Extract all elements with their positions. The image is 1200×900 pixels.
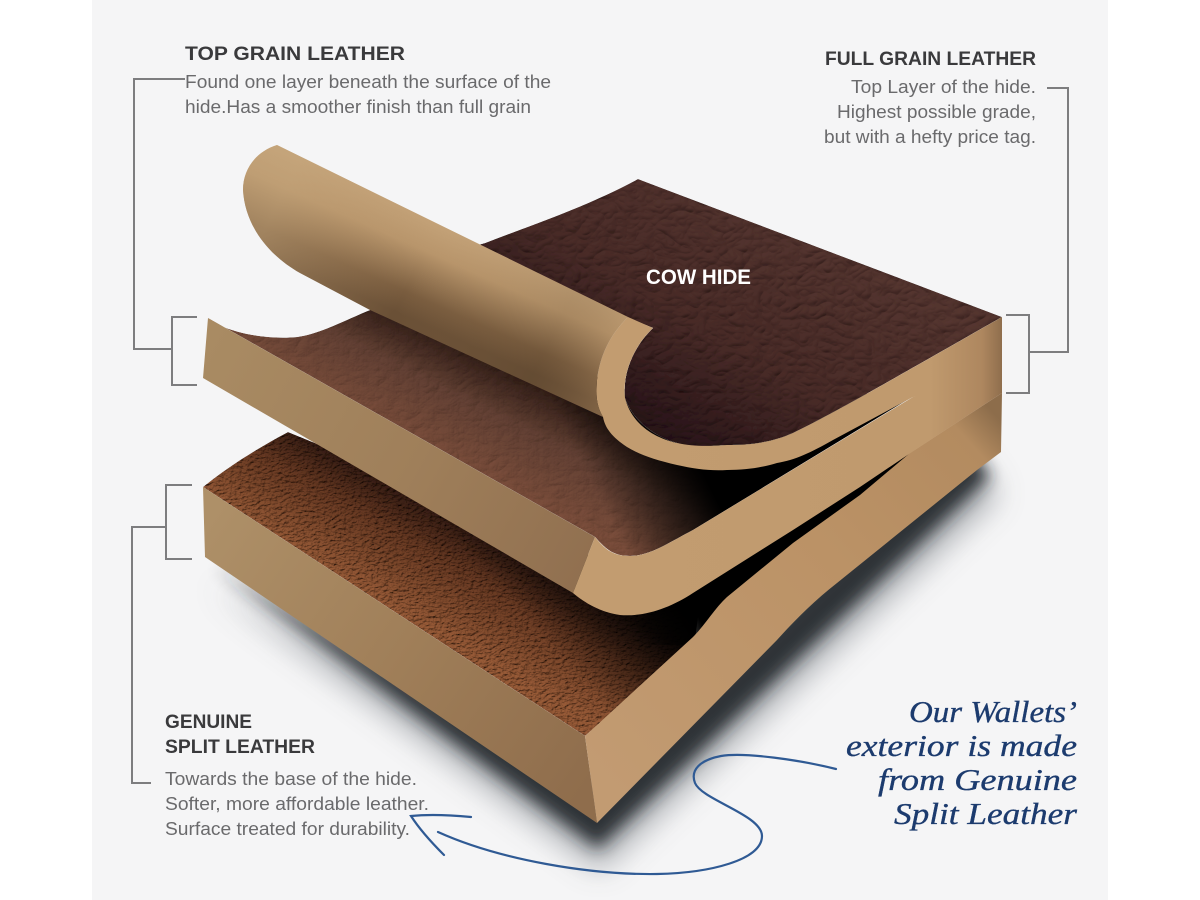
label: top grain leather: Found one layer beneath the surface of the (185, 72, 551, 92)
handwritten callout: Our Wallets’ (909, 694, 1077, 729)
rolled back leather flap (243, 145, 628, 417)
label: full grain leather: Highest possible grade, (837, 102, 1036, 122)
bracket: top grain leather (134, 79, 197, 385)
top grain left cut face (203, 318, 595, 593)
label: genuine split leather: SPLIT LEATHER (165, 737, 315, 758)
bracket: genuine split leather (132, 485, 192, 783)
genuine right cut face (585, 393, 1002, 823)
genuine left cut face (203, 487, 597, 823)
handwritten callout: from Genuine (878, 762, 1077, 797)
label: full grain leather: Top Layer of the hide. (851, 77, 1036, 97)
bracket: full grain leather (1006, 88, 1068, 393)
gap shadow lower (630, 450, 915, 645)
label: top grain leather: hide.Has a smoother finish than full grain (185, 97, 531, 117)
layer: full grain leather (243, 145, 1002, 470)
handwritten callout: Split Leather (894, 796, 1078, 831)
layer: top grain leather (203, 290, 1002, 615)
top grain right cut face (573, 380, 1002, 615)
label: genuine split leather: Softer, more affordable leather. (165, 794, 429, 814)
arrow: callout to genuine leather (411, 755, 836, 874)
layer: genuine split leather (203, 393, 1002, 823)
label: full grain leather: but with a hefty price tag. (824, 127, 1036, 147)
genuine leather surface (203, 432, 700, 736)
label: cow hide: COW HIDE (646, 266, 751, 289)
label: full grain leather: FULL GRAIN LEATHER (825, 49, 1036, 70)
label: top grain leather: TOP GRAIN LEATHER (185, 44, 405, 65)
full grain surface (460, 179, 1002, 446)
label: genuine split leather (165, 712, 429, 839)
full grain cut face (597, 317, 1002, 470)
handwritten callout (846, 694, 1078, 831)
label: genuine split leather: Surface treated for durability. (165, 819, 410, 839)
handwritten callout: exterior is made (846, 728, 1077, 763)
label: full grain leather (824, 49, 1036, 147)
drop shadow (212, 440, 998, 870)
label: top grain leather (185, 44, 551, 117)
label: genuine split leather: Towards the base of the hide. (165, 769, 417, 789)
top grain surface (208, 290, 920, 556)
label: genuine split leather: GENUINE (165, 712, 252, 733)
